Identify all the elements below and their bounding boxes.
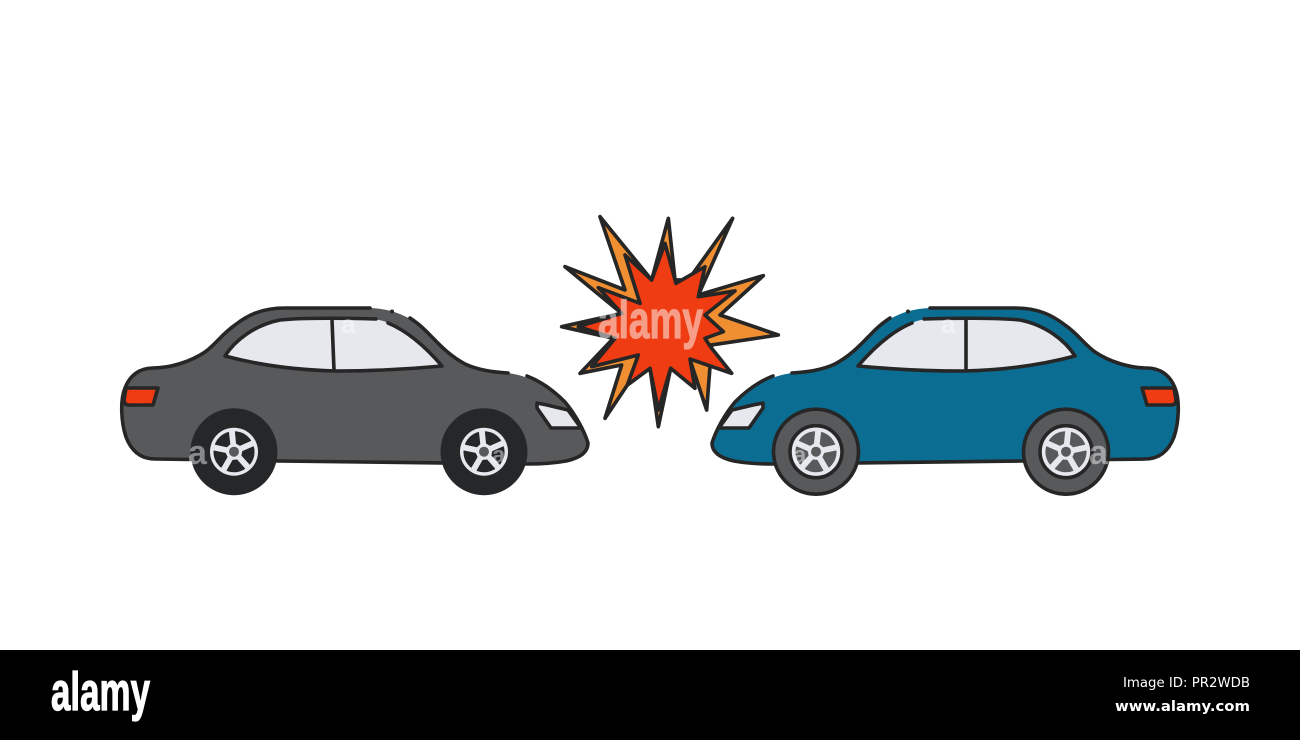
blue car body (712, 308, 1178, 464)
watermark: letters on blue car: a (1089, 434, 1109, 472)
watermark: letters on blue car: a (793, 442, 807, 469)
explosion burst (562, 217, 778, 427)
blue car front wheel (774, 409, 858, 494)
grey car rear wheel (190, 408, 278, 495)
blue car rear wheel (1024, 409, 1108, 494)
blue car headlight (719, 403, 763, 428)
footer image id: Image ID: PR2WDB (1123, 675, 1250, 691)
grey car headlight (537, 403, 581, 428)
watermark: letters on grey car: a (341, 309, 356, 339)
footer logo: alamy (51, 662, 150, 722)
burst inner red star (578, 243, 735, 410)
grey car windows (225, 318, 442, 371)
watermark: letters on blue car: a (941, 309, 956, 339)
watermark: centre alamy: alamy (598, 291, 703, 350)
blue car tail light (1142, 388, 1176, 405)
watermark: letters on grey car: a (492, 442, 506, 469)
blue car windows (858, 318, 1075, 371)
footer website: www.alamy.com (1115, 699, 1250, 715)
watermark: letters on grey car (188, 309, 506, 472)
grey car body (122, 308, 588, 464)
footer bar (0, 650, 1300, 740)
grey car tail light (124, 388, 158, 405)
burst outer orange star (562, 217, 778, 427)
grey car (122, 308, 588, 495)
grey car front wheel (440, 408, 528, 495)
watermark: letters on blue car (793, 309, 1109, 472)
blue car (712, 308, 1178, 494)
watermark: letters on grey car: a (188, 434, 208, 472)
